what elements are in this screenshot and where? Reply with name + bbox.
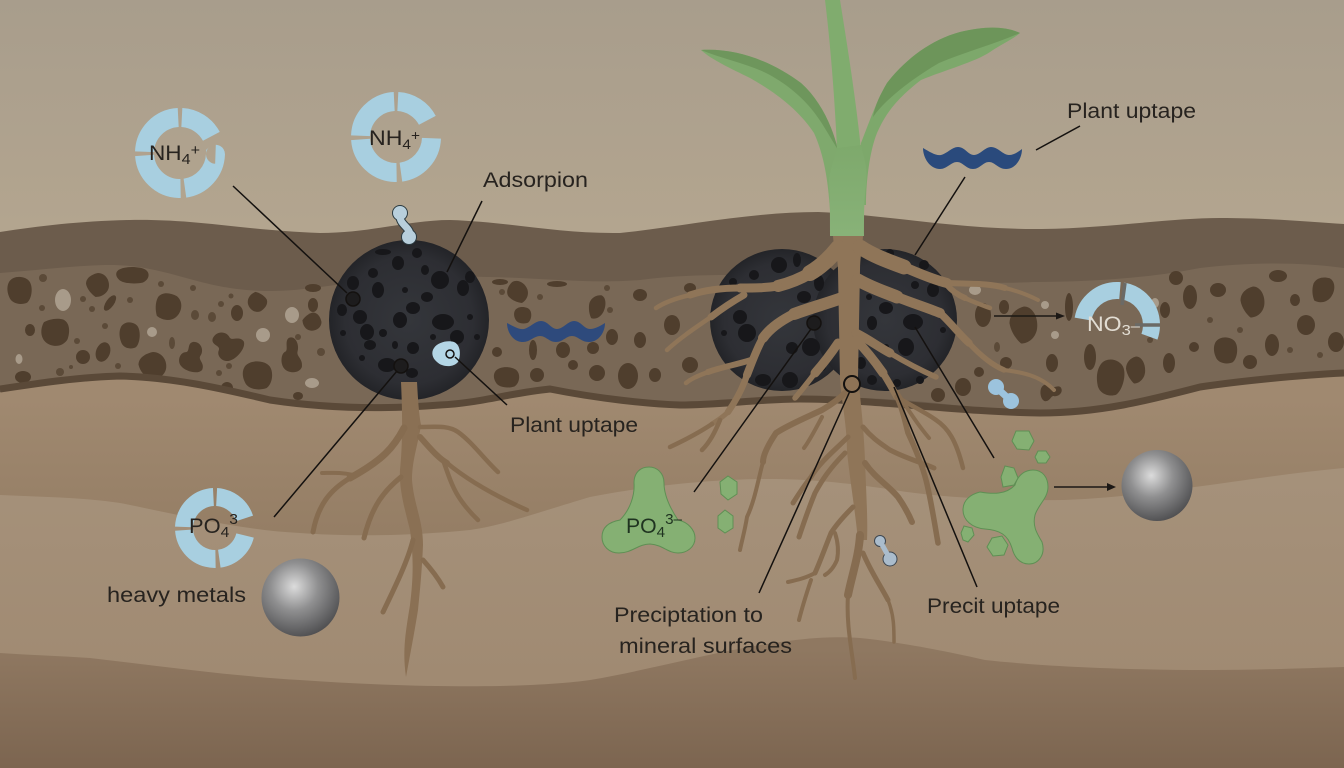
adsorbed ion on left biochar bbox=[432, 341, 460, 366]
nitrate ring: – bbox=[1131, 318, 1141, 335]
label: heavy metals: heavy metals bbox=[107, 584, 246, 607]
soil layer: upper dark band bbox=[0, 212, 1344, 420]
phosphate blob left: 4 bbox=[657, 524, 665, 541]
arrow to metal sphere bbox=[1054, 483, 1116, 491]
mineral crystals bbox=[718, 431, 1050, 556]
ammonium ring left: + bbox=[191, 142, 200, 159]
nitrate ring: 3 bbox=[1122, 322, 1131, 339]
arrow to nitrate bbox=[994, 312, 1065, 320]
ammonium ring right bbox=[359, 100, 433, 174]
stem bbox=[829, 145, 867, 236]
phosphate ring: PO bbox=[189, 515, 219, 538]
label: Precit uptape: Precit uptape bbox=[927, 595, 1060, 618]
water droplet: lower root zone bbox=[874, 536, 897, 566]
roots: right plant bbox=[656, 236, 1054, 678]
leader lines bbox=[233, 126, 1080, 593]
water droplet: right soil bbox=[988, 379, 1019, 409]
soil layer: pebble band bbox=[0, 264, 1344, 412]
left leaf bbox=[701, 50, 838, 210]
heavy metal sphere right bbox=[1122, 450, 1192, 521]
heavy metal sphere left bbox=[262, 558, 340, 636]
phosphate blob left: PO bbox=[626, 515, 656, 538]
ammonium ring left: 4 bbox=[182, 151, 191, 168]
label: Adsorpion: Adsorpion bbox=[483, 169, 588, 192]
right leaf bbox=[858, 28, 1020, 205]
phosphate blob right bbox=[963, 470, 1048, 564]
upper roots in biochar layer bbox=[656, 236, 1054, 540]
phosphate blob left bbox=[602, 467, 695, 553]
nitrate ring: NO bbox=[1087, 313, 1118, 336]
label: Preciptation to: Preciptation to bbox=[614, 604, 763, 627]
phosphate ring bbox=[177, 490, 253, 566]
ammonium ring right: NH bbox=[369, 127, 399, 150]
soil layer: bottom deep band bbox=[0, 637, 1344, 768]
ammonium ring left bbox=[143, 116, 217, 190]
soil layer: lower light band bbox=[0, 468, 1344, 768]
label: mineral surfaces: mineral surfaces bbox=[619, 635, 792, 658]
phosphate ring: 3 bbox=[229, 511, 238, 528]
phosphate ring: 4 bbox=[221, 524, 229, 541]
lower roots in tan layers bbox=[670, 392, 963, 678]
nitrate ring bbox=[1081, 283, 1160, 361]
biochar particle: left bbox=[329, 240, 489, 400]
phosphate blob left: 3– bbox=[665, 511, 683, 528]
plant: leaves and stem bbox=[701, 0, 1020, 236]
water droplet: top of left biochar bbox=[392, 206, 416, 244]
ammonium ring right: 4 bbox=[402, 136, 411, 152]
biochar particle: right bbox=[710, 249, 957, 391]
pebbles in soil bbox=[7, 267, 1344, 402]
nitrate wave: beside left biochar bbox=[507, 321, 605, 342]
label: Plant uptape top right: Plant uptape bbox=[1067, 100, 1196, 123]
dark seam under pebble band bbox=[0, 373, 1344, 413]
nitrate wave: above right biochar bbox=[923, 147, 1022, 169]
roots: left plant bbox=[313, 382, 527, 677]
ammonium ring left: NH bbox=[149, 142, 179, 165]
label: Plant uptape middle: Plant uptape bbox=[510, 414, 638, 437]
ammonium ring right: + bbox=[411, 127, 420, 143]
soil layer: middle tan band bbox=[0, 374, 1344, 768]
centre leaf bbox=[825, 0, 861, 150]
